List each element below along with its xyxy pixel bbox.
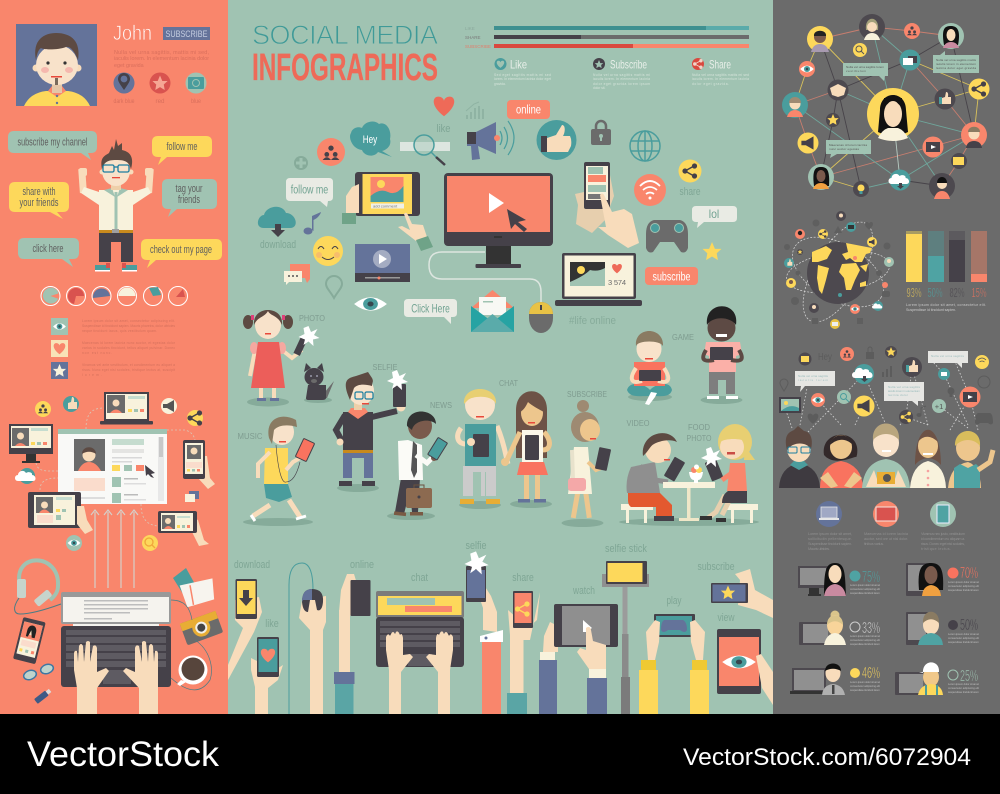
tablet with hands xyxy=(342,172,433,251)
people labels: FOOD xyxy=(688,423,710,432)
like subscribe share columns: Like xyxy=(510,58,527,72)
profile avatar xyxy=(16,24,97,106)
plus circle xyxy=(294,156,308,170)
stacked bar chart xyxy=(906,231,987,312)
stat: 33%: Lorem ipsum dolor sit amet xyxy=(850,634,880,638)
stat: 33% xyxy=(799,610,881,646)
stat: 70%: Lorem ipsum dolor sit amet xyxy=(948,580,979,584)
laptop device xyxy=(100,392,153,424)
hands row: online phone xyxy=(334,559,374,714)
hands row: download phone: download xyxy=(234,559,270,571)
hands row: download phone xyxy=(228,559,270,680)
glasses xyxy=(22,663,55,681)
like subscribe share columns: iaculis lorem. In elementum lacinia xyxy=(692,77,749,81)
hands row: online phone: online xyxy=(350,559,374,571)
stat: 75%: consectetur adipiscing elit xyxy=(850,587,880,591)
speech bubbles: check out my page xyxy=(150,244,212,256)
device category text: finibus varius. xyxy=(864,542,884,546)
device category text: Suspendisse tincidunt sapien. xyxy=(808,542,852,546)
node: chat xyxy=(900,50,920,70)
network speech bubbles: lacinia dolor eget gravida xyxy=(936,66,976,70)
subscribe label: subscribe xyxy=(652,272,690,284)
like subscribe share columns: dolor eget gravida lorem ipsum xyxy=(593,82,650,86)
click here bubble: Click Here xyxy=(411,302,450,316)
bar chart icon xyxy=(466,102,484,119)
node: megaphone xyxy=(798,132,818,154)
profile description xyxy=(114,50,210,69)
hands row: share phone: share xyxy=(512,572,534,584)
orbit nodes xyxy=(784,211,894,329)
person: music boy walking xyxy=(243,417,315,526)
heart and like xyxy=(434,97,454,135)
hands row: selfie flash xyxy=(464,540,503,714)
six pie icons xyxy=(41,285,187,306)
device category text: Vivamus nec justo, vestibulum xyxy=(921,532,965,536)
crowd network: icons: +1 xyxy=(935,402,943,411)
like subscribe share columns: Nulla vel urna sagittis mattis mi sed xyxy=(692,73,749,77)
hands row: laptop typing xyxy=(376,572,464,714)
phone device with hand xyxy=(183,440,215,489)
man with glasses xyxy=(779,426,820,488)
node: handshake xyxy=(828,80,848,100)
megaphone xyxy=(467,121,514,160)
stat: 70% xyxy=(906,563,980,596)
progress bars: LIKE xyxy=(465,26,475,31)
lol bubble xyxy=(692,206,737,228)
stat: 50%: Lorem ipsum dolor sit amet xyxy=(948,632,979,636)
people labels: SUBSCRIBE xyxy=(567,390,607,399)
stat: 70%: consectetur adipiscing elit xyxy=(948,584,979,588)
hands row: play game xyxy=(639,595,709,714)
people labels: PHOTO xyxy=(299,314,325,323)
speech bubbles xyxy=(8,131,222,268)
music note xyxy=(304,212,321,234)
four upward arrows xyxy=(91,510,138,588)
crowd network: icons: lacinia dolor xyxy=(888,393,908,397)
camera xyxy=(180,611,223,645)
icon row: map pin, star, camera: blue xyxy=(191,99,202,105)
people labels: NEWS xyxy=(430,401,452,410)
follow me bubble: follow me xyxy=(291,184,328,196)
click here bubble xyxy=(404,299,457,324)
follow me bubble xyxy=(286,178,333,207)
like subscribe share columns: Share xyxy=(709,58,731,72)
device category text: Mauris ultricies. xyxy=(808,547,830,551)
title: INFOGRAPHICS xyxy=(252,47,438,89)
legend icons and text: Lorem ipsum dolor sit amet, consectetur adipiscing elit. xyxy=(82,319,175,323)
device category text: sollicitudin pellentesque. xyxy=(808,537,852,541)
node: bulb xyxy=(853,181,869,197)
hands row: laptop typing: chat xyxy=(411,572,428,584)
subscribe label xyxy=(645,267,698,285)
monitor device xyxy=(9,424,53,463)
browser window xyxy=(58,429,167,504)
stat: 50%: suspendisse tincidunt lorem xyxy=(948,640,980,644)
like subscribe share columns xyxy=(494,58,749,90)
watermark: image url: VectorStock.com/6072904 xyxy=(683,744,971,771)
wifi circle xyxy=(634,174,666,206)
stacked bar chart: Suspendisse id tincidunt sapien. xyxy=(906,308,956,312)
device category text xyxy=(808,532,965,551)
watermark: VectorStock logo: VectorStock xyxy=(27,735,220,774)
hands row: view tablet xyxy=(717,612,773,705)
crowd network: icons: Nulla vel urna sagittis xyxy=(798,374,828,378)
cloud download xyxy=(258,207,296,251)
device category text: auctor, sed ore ut nisi dolor. xyxy=(864,537,908,541)
node: star xyxy=(826,113,840,127)
woman coral xyxy=(820,435,863,488)
boy in teal tank xyxy=(948,431,993,488)
notebook xyxy=(173,568,214,608)
phone with two hands xyxy=(575,162,639,248)
crowd network: icons: iaculis lorem in elementum xyxy=(888,389,920,393)
connected devices illustration xyxy=(9,392,215,588)
usb stick xyxy=(34,688,52,704)
hands row: selfie flash: selfie xyxy=(466,540,486,552)
node: cloud xyxy=(888,170,910,190)
device category text: risus. Donec eget nisi sodales, xyxy=(921,542,965,546)
lol bubble: lol xyxy=(709,207,719,221)
stacked bar chart: 93% xyxy=(906,286,922,300)
people: cafe couple with table xyxy=(619,424,759,526)
Hey chat cloud: Hey xyxy=(363,134,378,146)
video player xyxy=(355,244,410,282)
device category text: Maecenas id lorem lacinia xyxy=(864,532,909,536)
legend icons and text: neque tincidunt lacus, quis vestibulum quam. xyxy=(82,329,157,333)
map pin xyxy=(326,276,342,298)
person: girl taking photo with cat xyxy=(243,310,320,406)
title: SOCIAL MEDIA xyxy=(252,20,438,50)
stat: 46%: consectetur adipiscing elit xyxy=(850,684,880,688)
progress bars: SHARE xyxy=(465,35,481,40)
boy with camera xyxy=(862,424,910,488)
like subscribe share columns: Sed eget sagittis mattis mi sed xyxy=(494,73,551,77)
legend icons and text: varius in sodales tincidunt, tellus aliquet pulvinar. Donec xyxy=(82,346,175,350)
gamepad xyxy=(646,220,688,252)
thumbs up circle xyxy=(536,120,576,160)
like subscribe share columns: dolor sit. xyxy=(593,86,606,90)
crowd network: icons: iaculis lorem xyxy=(798,378,828,382)
device category text: tristique lectus. xyxy=(921,547,951,551)
tablet device with hand xyxy=(28,492,93,534)
envelope xyxy=(471,290,514,332)
network nodes xyxy=(782,14,990,199)
stat: 25% xyxy=(895,662,980,695)
share icon and label xyxy=(678,160,702,198)
legend icons and text: risus. Nunc eget nisi sodales, tristique lectus at, suscipit xyxy=(82,368,175,372)
icon row: map pin, star, camera: dark blue xyxy=(114,99,135,105)
stat: 33%: consectetur adipiscing elit xyxy=(850,638,880,642)
crowd network: icons xyxy=(779,346,993,424)
stat: 50%: consectetur adipiscing elit xyxy=(948,636,979,640)
mouse xyxy=(529,302,553,333)
coffee cup and cables xyxy=(171,600,211,690)
padlock xyxy=(591,121,611,145)
network connections xyxy=(795,27,979,189)
stat: 75%: suspendisse tincidunt lorem xyxy=(850,591,881,595)
stacked bar chart: Lorem ipsum dolor sit amet, consectetur elit. xyxy=(906,303,986,307)
girl in cream xyxy=(910,430,946,488)
profile description: eget gravida xyxy=(114,63,144,69)
profile name and subscribe: SUBSCRIBE xyxy=(166,29,208,39)
node: search xyxy=(853,43,867,57)
stat: 33%: 33% xyxy=(862,620,880,637)
speech bubbles: follow me xyxy=(166,141,198,153)
profile description: Nulla vel urna sagittis, mattis mi sed, xyxy=(114,50,210,56)
crowd network: lines xyxy=(784,352,978,432)
profile name and subscribe xyxy=(113,22,210,45)
desk laptop with typing hands xyxy=(61,592,171,714)
hands row: play game: play xyxy=(666,595,682,607)
network speech bubbles: vestibulum xyxy=(846,69,866,73)
floating social icons xyxy=(15,396,203,551)
icon row: map pin, star, camera xyxy=(114,72,206,105)
progress bars: SUBSCRIBE xyxy=(465,44,491,49)
speech bubbles: subscribe my channel xyxy=(18,136,88,148)
people labels xyxy=(238,314,712,443)
landscape phone with hand xyxy=(158,511,209,546)
speech bubbles: tag your xyxy=(176,183,203,195)
person: chat boy xyxy=(458,389,508,509)
hashtag text: #life online xyxy=(569,315,616,327)
headphones xyxy=(15,560,61,614)
node: share xyxy=(968,78,990,100)
cat xyxy=(304,363,334,403)
stat: 33%: suspendisse tincidunt lorem xyxy=(850,642,881,646)
globe with orbiting icons xyxy=(781,211,895,332)
speech bubbles: your friends xyxy=(20,197,59,209)
crowd network: icons: Nulla vel urna sagittis xyxy=(931,354,964,358)
node: envelope xyxy=(951,153,967,169)
smartphone on desk xyxy=(13,617,46,664)
network speech bubbles: Maecenas id lorem lacinia xyxy=(829,143,867,147)
title xyxy=(252,20,438,89)
stacked bar chart: 15% xyxy=(972,286,986,300)
legend icons and text: Vivamus vel ante vestibulum, et condimentum eu aliquet a xyxy=(82,363,175,367)
panel: right grey background xyxy=(773,0,1000,714)
person: selfie man xyxy=(336,370,408,492)
network speech bubbles: nunc auctor egestas xyxy=(829,147,860,151)
hands row: subscribe phone xyxy=(698,561,773,618)
stat: 75%: 75% xyxy=(862,569,880,586)
laptop with photo xyxy=(555,253,642,306)
stat: 46%: Lorem ipsum dolor sit amet xyxy=(850,680,880,684)
hands row: like phone xyxy=(251,618,283,714)
Hey chat cloud xyxy=(350,121,392,157)
like subscribe share columns: gravida. xyxy=(494,82,506,86)
legend icons and text: non est nunc. xyxy=(82,351,112,355)
speech bubbles: share with xyxy=(22,186,56,198)
globe icon xyxy=(630,131,660,161)
like subscribe share columns: dolor eget gravida. xyxy=(692,82,729,86)
hands row: tablet watch: watch xyxy=(572,585,595,597)
icon row: map pin, star, camera: red xyxy=(156,99,164,105)
person: subscribe girl xyxy=(562,400,611,527)
online label xyxy=(507,100,550,119)
share icon and label: share xyxy=(680,186,700,198)
star xyxy=(702,242,722,260)
progress bars xyxy=(465,26,749,49)
stat: 75%: Lorem ipsum dolor sit amet xyxy=(850,583,880,587)
hands row: subscribe phone: subscribe xyxy=(698,561,734,573)
stat: 46%: suspendisse tincidunt lorem xyxy=(850,688,881,692)
crowd network: icons: Nulla vel urna sagittis xyxy=(888,385,920,389)
node: woman top xyxy=(859,14,885,40)
stat: 70%: suspendisse tincidunt lorem xyxy=(948,588,980,592)
person: chat girl xyxy=(501,391,552,508)
speech bubbles: click here xyxy=(32,243,64,255)
hands row: tablet watch xyxy=(539,585,618,714)
device category circles xyxy=(816,501,956,527)
panel: centre mint background xyxy=(228,0,773,714)
node: central woman xyxy=(867,88,919,141)
stat: 50% xyxy=(906,612,980,645)
laptop with photo: 3 574 xyxy=(608,278,626,287)
node: woman bottom-left xyxy=(808,164,834,190)
network speech bubbles xyxy=(826,51,979,158)
stat: 25%: suspendisse tincidunt lorem xyxy=(948,690,980,694)
crowd network: icons: Hey xyxy=(818,351,833,363)
hands row: share phone xyxy=(507,572,540,714)
online label: online xyxy=(516,104,541,116)
network speech bubbles: Nulla vel urna sagittis mattis xyxy=(936,58,976,62)
search bar xyxy=(400,135,450,165)
heart and like: like xyxy=(436,123,450,135)
node: woman top-right xyxy=(938,23,964,49)
group circle xyxy=(317,138,345,166)
stat: 25%: Lorem ipsum dolor sit amet xyxy=(948,682,979,686)
person: standing boy gaming xyxy=(700,306,742,404)
stat: 50%: 50% xyxy=(960,617,978,634)
legend icons and text: Maecenas id lorem lacinia nunc auctor, et egestas dolor xyxy=(82,341,176,345)
stat: 46% xyxy=(790,664,881,695)
like subscribe share columns: Nulla vel urna sagittis mattis mi xyxy=(593,73,650,77)
tablet with hands: add comment xyxy=(373,204,398,208)
legend icons and text xyxy=(51,318,176,379)
people labels: VIDEO xyxy=(626,419,650,428)
node: thumb xyxy=(934,88,956,110)
people labels: MUSIC xyxy=(238,432,263,441)
hands row: selfie stick xyxy=(602,543,649,714)
stat: 70%: 70% xyxy=(960,565,978,582)
network speech bubbles: Nulla vel urna sagittis lorem xyxy=(846,65,884,69)
cloud download: download xyxy=(260,239,296,251)
legend icons and text: lorem. xyxy=(82,373,102,377)
central character flexing xyxy=(78,139,154,272)
stat: 46%: 46% xyxy=(862,665,880,682)
stacked bar chart: 82% xyxy=(950,286,964,300)
device category text: Lorem ipsum dolor sit amet, xyxy=(808,532,852,536)
hands row: selfie stick: selfie stick xyxy=(605,543,647,555)
people labels: PHOTO xyxy=(686,434,712,443)
node: eye xyxy=(799,61,815,77)
person: news man with briefcase xyxy=(387,412,448,520)
node: man top-left xyxy=(807,26,833,52)
node: woman bottom-right xyxy=(929,173,955,199)
stat: 75% xyxy=(798,563,881,596)
profile description: iaculis lorem. In elementum lacinia dolor xyxy=(114,56,209,62)
node: video xyxy=(922,136,944,158)
people labels: GAME xyxy=(672,333,694,342)
hands row: mouse with cable xyxy=(289,563,326,714)
legend icons and text: Suspendisse id tincidunt sapien. Mauris pharetra, dolor ultricies xyxy=(82,324,175,328)
hands row: view tablet: view xyxy=(718,612,735,624)
person: sitting boy gaming xyxy=(627,331,672,405)
panel: left coral background xyxy=(0,0,228,714)
like subscribe share columns: Subscribe xyxy=(610,58,647,72)
watermark strip xyxy=(0,714,1000,794)
stacked bar chart: 50% xyxy=(928,286,942,300)
large eye xyxy=(354,297,387,311)
crowd people row xyxy=(779,424,993,488)
node: group xyxy=(904,23,920,39)
smiley xyxy=(313,236,343,266)
like subscribe share columns: iaculis lorem. In elementum lacinia xyxy=(593,77,650,81)
device category text: id condimentum eu aliquam a. xyxy=(921,537,965,541)
speech bubbles: friends xyxy=(178,194,200,206)
stat: 25%: consectetur adipiscing elit xyxy=(948,686,979,690)
stat: 25%: 25% xyxy=(960,668,978,685)
node: woman left xyxy=(782,92,808,118)
chat bubbles small xyxy=(284,264,310,285)
people labels: SELFIE xyxy=(372,363,398,372)
node: man right xyxy=(961,122,987,148)
network speech bubbles: iaculis lorem in elementum xyxy=(936,62,976,66)
hands row: like phone: like xyxy=(265,618,279,630)
profile name and subscribe: John xyxy=(113,22,152,45)
people labels: CHAT xyxy=(499,379,518,388)
like subscribe share columns: lorem. In elementum lacinia dolor eget xyxy=(494,77,551,81)
desktop monitor with video xyxy=(429,173,553,303)
